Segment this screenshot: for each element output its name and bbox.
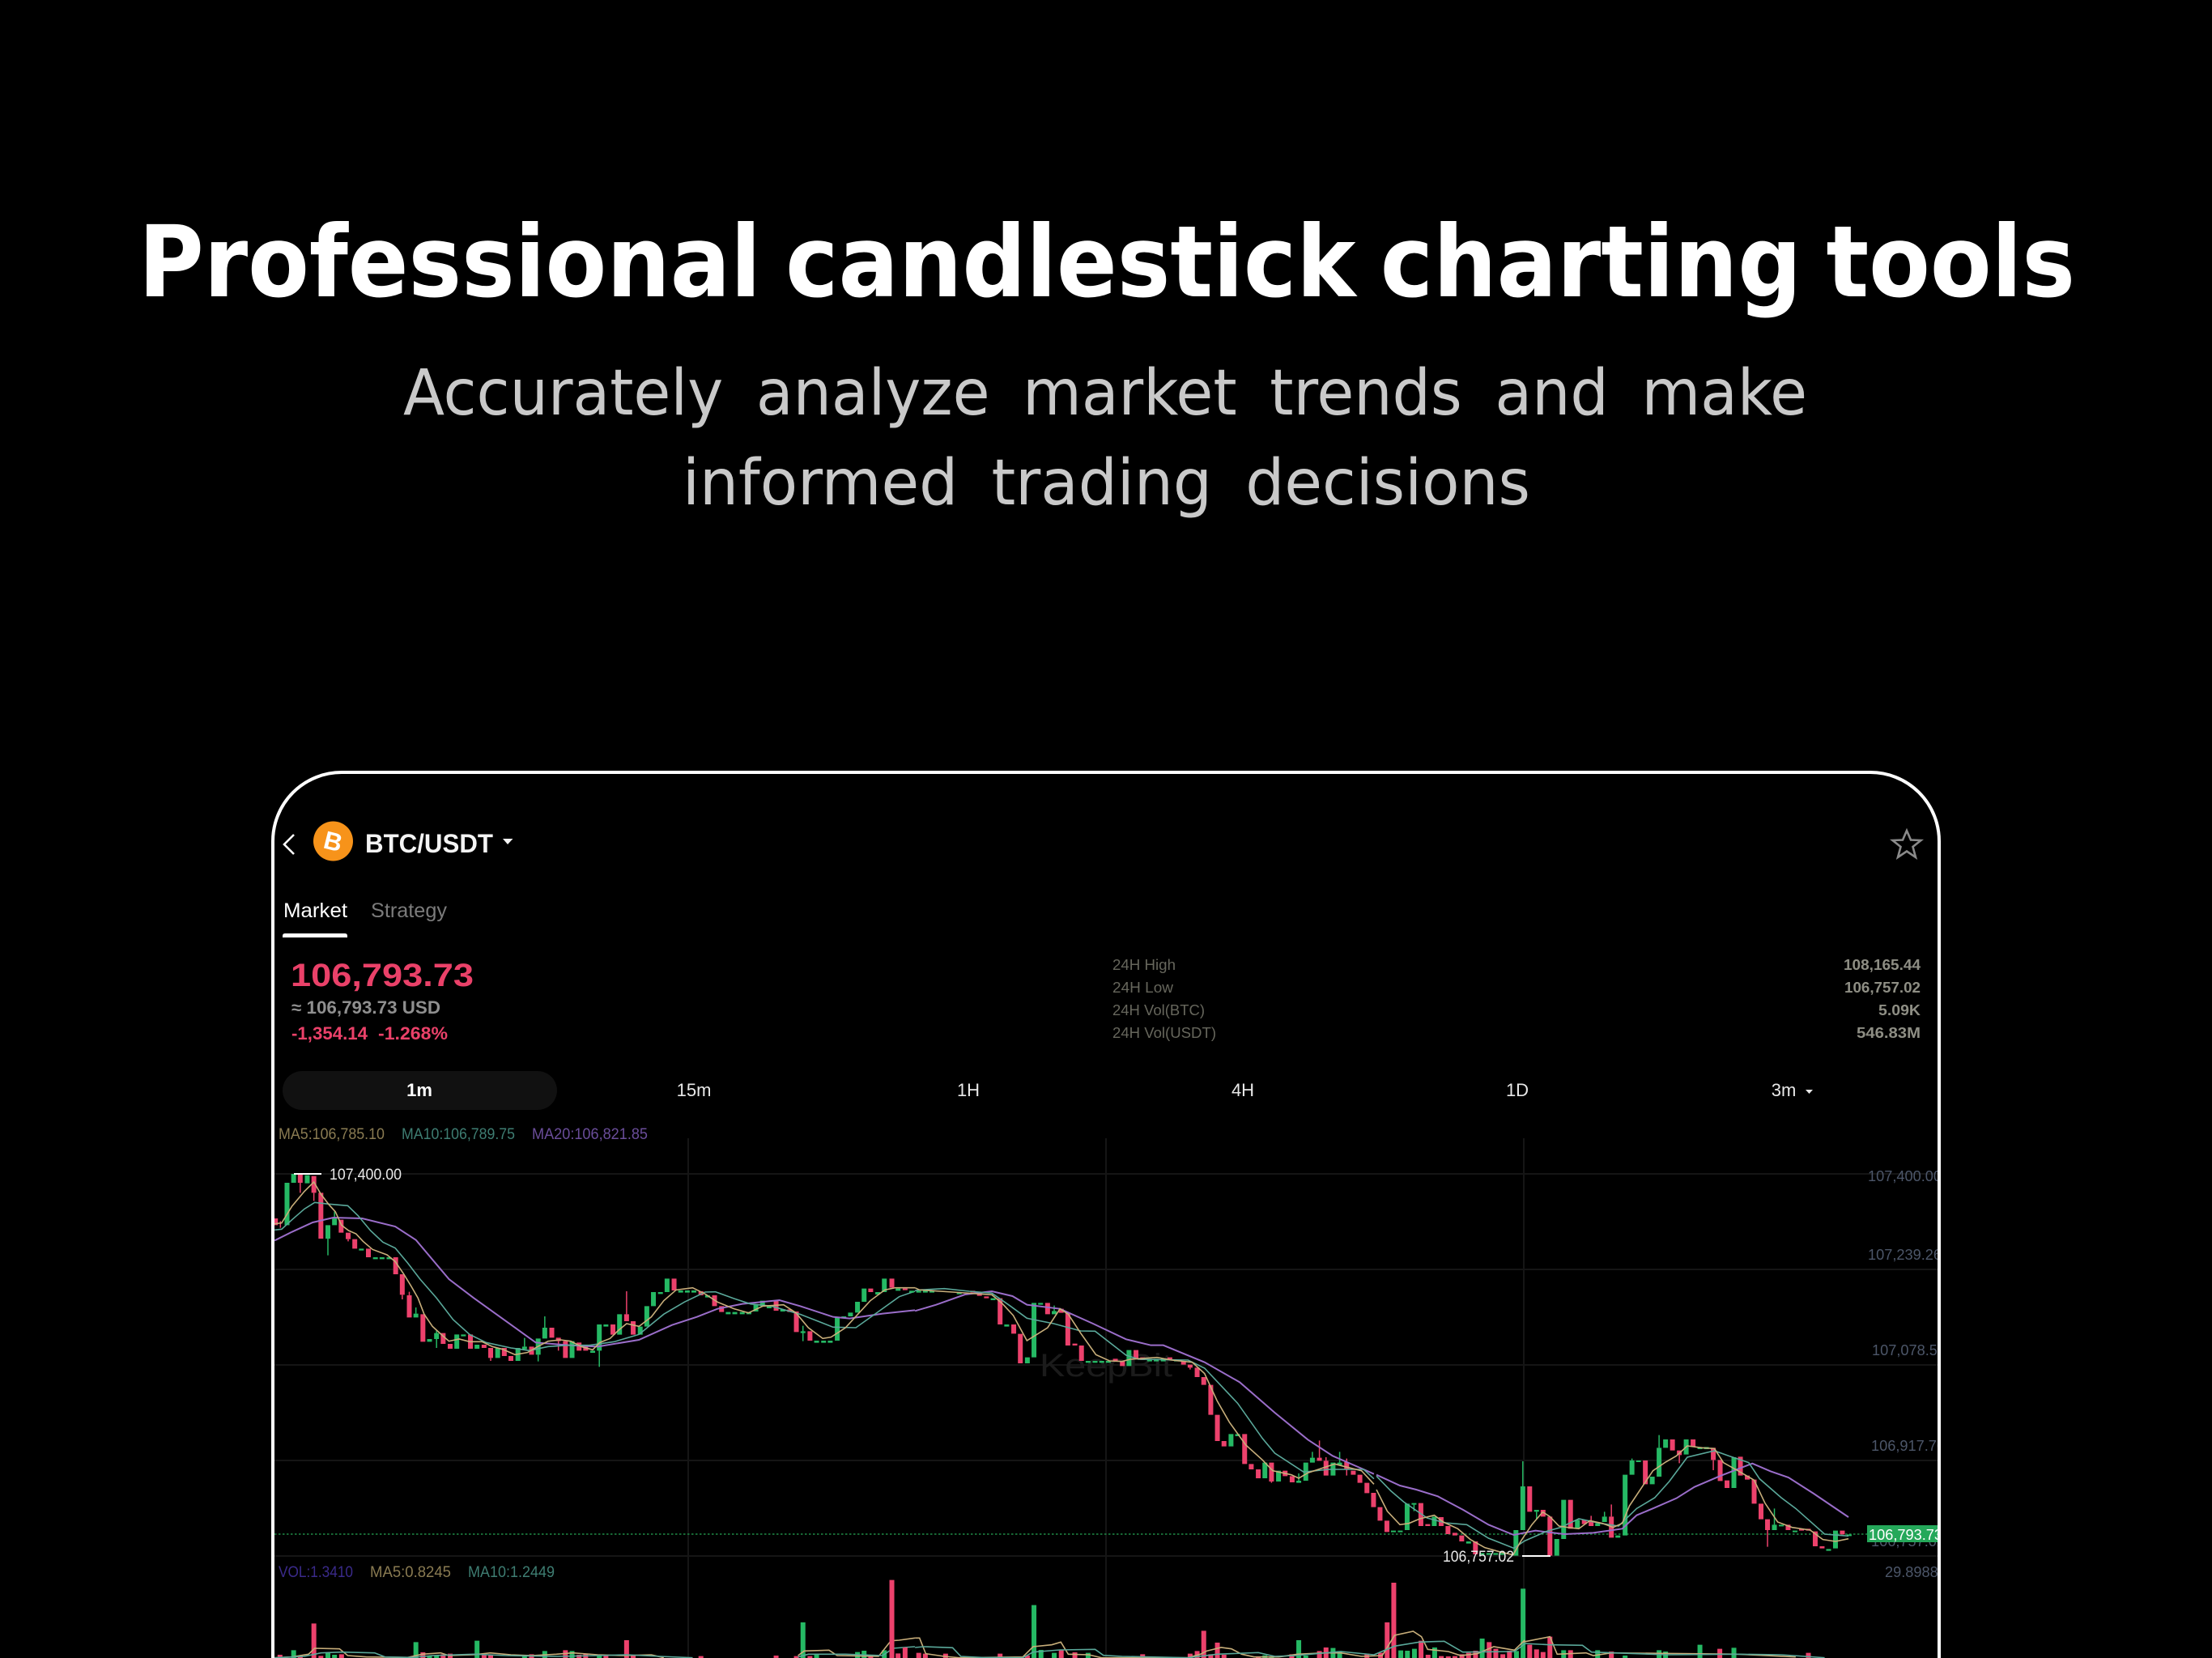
statistic values: 108,165.44 <box>1844 957 1921 973</box>
volume legend <box>279 1566 554 1577</box>
statistic values <box>1844 957 1921 1041</box>
statistic labels: 24H High <box>1112 957 1176 973</box>
current price tag: 106,793.73 <box>1869 1527 1942 1543</box>
candles: right section <box>1373 1435 1849 1556</box>
volume bars: right section <box>1523 1637 1825 1658</box>
timeframe selector <box>283 1071 1813 1110</box>
subtitle <box>403 357 1807 520</box>
statistic labels: 24H Low <box>1112 980 1174 996</box>
usd equivalent: ≈ 106,793.73 USD <box>291 997 440 1018</box>
timeframe labels: 1D <box>1506 1080 1529 1100</box>
low price marker <box>1444 1551 1551 1564</box>
candles: left section <box>274 1174 915 1367</box>
moving average legend <box>279 1129 648 1141</box>
candles: middle section <box>892 1278 1374 1493</box>
volume bars: left section <box>274 1622 915 1658</box>
statistic values: 546.83M <box>1857 1025 1921 1041</box>
title: Professional candlestick charting tools <box>138 205 2075 320</box>
volume bars: middle section <box>892 1580 1525 1658</box>
statistic labels: 24H Vol(BTC) <box>1112 1002 1205 1018</box>
timeframe labels: 3m <box>1772 1080 1796 1100</box>
price axis labels: 107,078.51 <box>1872 1342 1946 1358</box>
active timeframe pill <box>283 1071 557 1110</box>
chart grid <box>274 1138 1938 1658</box>
tab: Market: Market <box>283 899 347 922</box>
tab: Strategy: Strategy <box>371 899 447 922</box>
pair name: BTC/USDT <box>365 829 493 858</box>
24h statistics <box>1112 957 1921 1041</box>
price axis labels <box>1869 1171 1938 1577</box>
price axis labels: 106,757.02 <box>1871 1533 1945 1550</box>
device frame <box>273 772 1939 1658</box>
timeframe labels: 15m <box>677 1080 711 1100</box>
high price marker <box>294 1169 402 1182</box>
icon: bitcoin coin <box>313 821 353 861</box>
statistic values: 106,757.02 <box>1844 980 1921 996</box>
icon: pair caret <box>503 839 513 844</box>
statistic labels <box>1112 957 1216 1041</box>
price axis labels: 107,239.26 <box>1868 1247 1942 1263</box>
price axis labels: 107,400.00 <box>1868 1168 1942 1184</box>
price axis labels: 106,917.76 <box>1871 1438 1945 1454</box>
timeframe labels: 4H <box>1231 1080 1254 1100</box>
timeframe labels: 1m <box>406 1080 432 1100</box>
tabs <box>283 899 447 937</box>
active tab underline <box>283 933 347 937</box>
last price: 106,793.73 <box>291 958 474 993</box>
price change: -1.268% <box>378 1023 448 1044</box>
statistic values: 5.09K <box>1878 1002 1921 1018</box>
icon: back chevron <box>284 835 294 854</box>
timeframe labels <box>408 1083 1795 1096</box>
watermark: KeepBit <box>1040 1348 1172 1384</box>
panel: phone app screen <box>274 821 1946 1658</box>
price change: -1,354.14 <box>291 1023 368 1044</box>
timeframe labels: 1H <box>957 1080 980 1100</box>
price axis labels: 29.8988 <box>1885 1564 1938 1580</box>
volume legend: VOL:1.3410 <box>279 1564 353 1581</box>
price block <box>291 958 474 1044</box>
moving average legend: MA10:106,789.75 <box>402 1126 515 1143</box>
icon: timeframe caret <box>1806 1090 1813 1094</box>
moving average legend: MA5:106,785.10 <box>279 1126 385 1143</box>
low price marker: 106,757.02 <box>1443 1549 1514 1566</box>
volume legend: MA5:0.8245 <box>370 1564 451 1581</box>
statistic labels: 24H Vol(USDT) <box>1112 1025 1216 1041</box>
infographic canvas <box>147 221 2071 1658</box>
moving average legend: MA20:106,821.85 <box>532 1126 648 1143</box>
icon: favourite star <box>1893 831 1921 857</box>
high price marker: 107,400.00 <box>330 1167 402 1184</box>
volume bar chart <box>274 1580 1825 1658</box>
header bar <box>284 821 1921 861</box>
subtitle: Accurately analyze market trends and make <box>403 357 1807 430</box>
volume legend: MA10:1.2449 <box>468 1564 555 1581</box>
subtitle: informed trading decisions <box>683 447 1530 520</box>
price change <box>291 1027 447 1043</box>
icon: bitcoin coin: B <box>321 826 345 857</box>
candlestick chart <box>274 1174 1849 1556</box>
current price dotted line <box>274 1533 1867 1535</box>
